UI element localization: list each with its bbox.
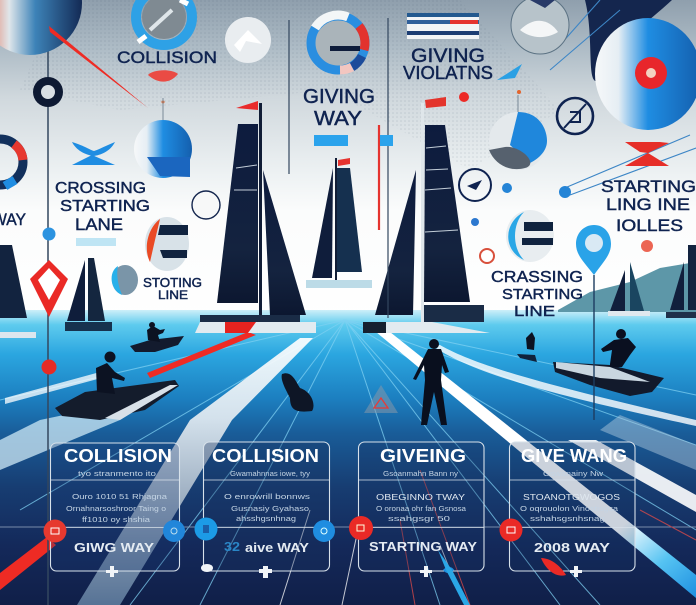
heading: starting line left: LINE [158,288,188,302]
ring: left edge [0,139,23,186]
heading: crossing starting lane: CROSSING [55,180,146,197]
panel footer: 2008 WAY [534,540,610,555]
jet ski: small right [517,332,537,362]
heading: starting line left [143,275,202,302]
panel body [66,494,167,524]
panel subtitle: tyo stranmento ito [78,471,156,478]
marker: red square [44,520,66,542]
flag stripes [407,13,479,39]
boat: small left [65,258,112,331]
panel title: GIVEING [380,446,466,466]
boat: large centre-left [195,101,316,333]
icon: black circle [33,77,63,107]
heading: giving violations [403,46,493,83]
warning triangle [364,385,398,413]
panel body: O enrowrill bonnws [224,494,311,501]
panel footer [224,539,309,555]
pole: centre-left [288,20,290,174]
panel body: Ornahnarsoshroor Taing o [66,506,166,513]
pole: right [593,275,595,420]
panel body: sshahsgsnhsnag [530,516,605,523]
panel body: ff1010 oy shshia [82,517,150,524]
panel body: Ouro 1010 51 Rhjagna [72,494,167,501]
heading: collision: COLLISION [117,48,217,67]
marker: blue two [194,518,218,540]
heading: crossing starting lane: LANE [75,215,123,234]
red course stripe [0,537,56,590]
panel subtitle: Gsoanmahn Bann ny [383,471,459,478]
panel subtitle: Gwamahnnas iowe, tyy [230,471,311,478]
panel body: OBEGINNO TWAY [376,493,466,502]
panel footer: aive WAY [245,540,309,555]
boat: large centre-right [363,97,490,333]
heading: giving violations: VIOLATNS [403,63,493,83]
panel: collision two [203,442,330,571]
lens: red blue stripes [145,217,189,271]
panel footer: GIWG WAY [74,540,154,555]
panel body [520,493,620,523]
icon: outlined circle right low [459,169,491,201]
heading: crossing starting lane [55,180,150,234]
panel title: COLLISION [212,446,319,466]
red wake streak [147,332,256,378]
panel body: ahsshgsnhnag [236,516,296,523]
panel: collision one [50,443,180,571]
icon: forbidden mark [480,249,494,263]
sphere: blue left [134,98,192,178]
heading: starting line left: STOTING [143,275,202,290]
heading: crossing starting line right: STARTING [502,286,583,303]
mountains [558,262,696,312]
markers: blue dots [42,183,571,240]
heading: starting line rules: IOLLES [616,216,683,235]
map pin: blue [576,225,611,275]
jet ski: small [130,322,184,352]
perspective lines [0,320,696,605]
icon: outlined circle right top [557,98,593,134]
figure: kneeling [282,373,314,412]
marker: blue three [313,520,335,542]
panel title: COLLISION [64,446,172,466]
halftone haze [20,0,560,170]
accent lines right [550,0,696,195]
pole: centre-right [387,18,389,318]
heading: giving way: GIVING [303,86,375,108]
icon: outlined circle left [192,191,220,219]
panel body [376,493,466,523]
icon: red crossing mark [625,142,669,166]
jet ski: large right [553,329,664,396]
lens: small blue [112,265,138,295]
sphere: top left [0,0,148,108]
background sky [0,0,696,325]
marker: red four [349,516,373,540]
heading: giving way [303,86,375,130]
panel: giving [358,442,484,571]
panel body: Gusnasiy Gyahaso [231,506,309,513]
boat: far right [666,245,696,318]
sphere: glass top [511,0,569,54]
heading: giving way: WAY [314,108,362,130]
panel footer: STARTING WAY [369,539,477,554]
heading: crossing starting lane: STARTING [60,198,150,215]
boat: small right [608,262,650,316]
heading: crossing starting line right: LINE [514,303,555,320]
panel body [224,494,311,523]
dark corner [585,0,672,81]
icon: white badge [225,17,271,63]
heading: starting line rules: LING INE [606,195,690,214]
marker: blue one [163,520,185,542]
panel body: O oqrouolon Vinostisgsa [520,506,618,513]
heading: giving violations: GIVING [411,46,485,67]
heading: starting line rules [601,177,696,235]
panel title: GIVE WANG [521,446,627,466]
panel footer: 32 [224,539,240,554]
marker: red five [500,518,522,542]
map pin: red [30,260,68,317]
pole: left [47,0,49,605]
panel: give way [509,442,635,571]
panel body: STOANOTGWOGOS [523,493,620,502]
boat: centre [306,158,372,288]
wake stripes [0,332,696,605]
icon: blue crossing mark [72,142,115,165]
panel body: O oronaa ohr fan Gsnosa [376,506,466,513]
sphere: large blue with target [595,18,696,130]
panel body: ssahgsgr 50 [388,516,450,523]
lens: right stripes [506,210,554,262]
sea [0,310,696,605]
panel subtitle: Gswanainy Nw [543,471,604,478]
boat: far left [0,245,36,338]
heading: crossing starting line right: CRASSING [491,269,583,286]
markers: red dots [42,64,653,374]
connector arrows [106,550,582,605]
ring: centre top [310,15,366,71]
ring: top collision [136,0,192,45]
pole: red [378,125,380,230]
sphere: blue right [489,90,547,170]
figure: standing [413,339,449,425]
jet ski: large left [55,352,179,420]
heading: starting line rules: STARTING [601,177,696,196]
heading: crossing starting line right [491,269,583,320]
panel tab [76,135,393,246]
